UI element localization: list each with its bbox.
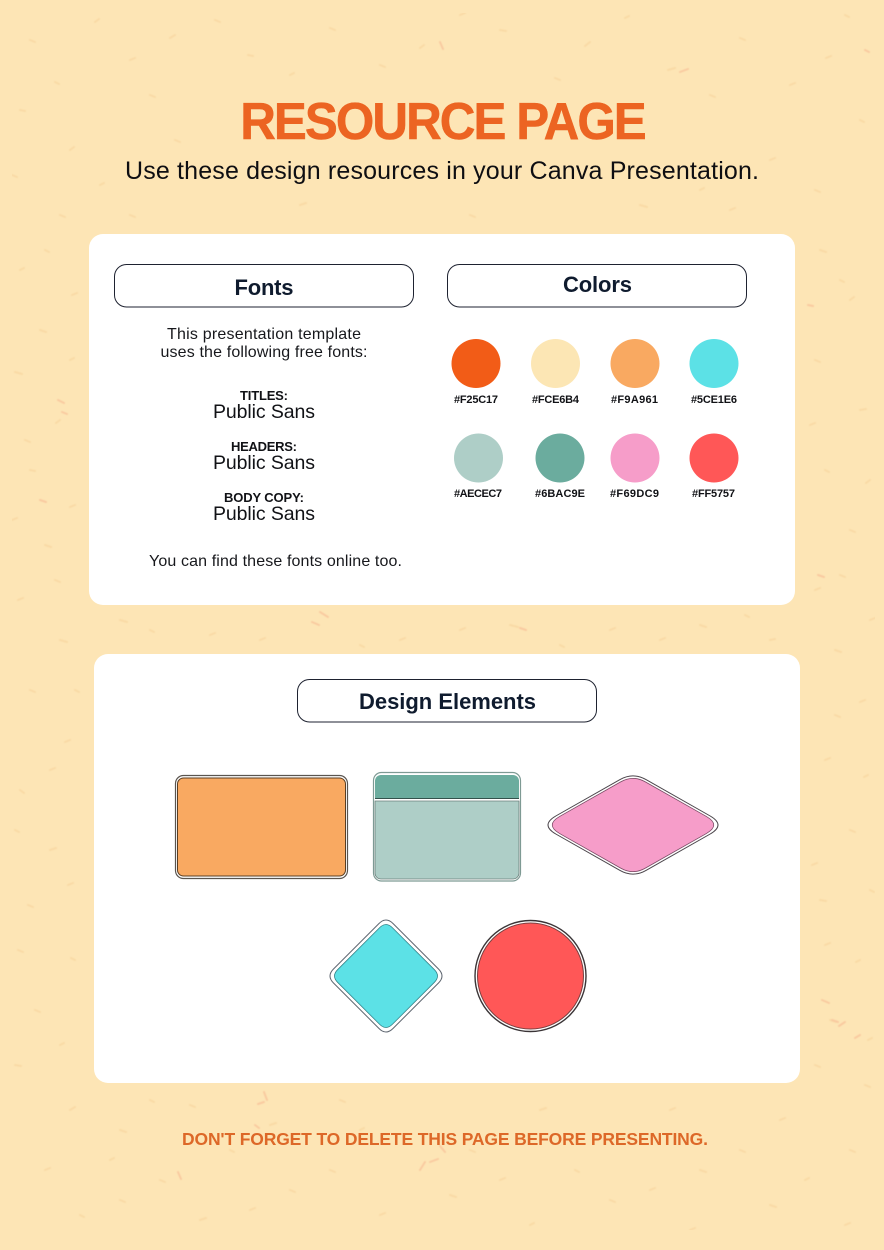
panel: fonts and colors <box>89 234 795 605</box>
swatch: 6BAC9E: #6BAC9E <box>535 488 585 500</box>
text block: titles font: Public Sans <box>213 401 315 423</box>
text block: body copy font <box>213 490 315 525</box>
element: cyan diamond <box>330 920 442 1032</box>
text block: fonts note: You can find these fonts online too. <box>149 553 402 570</box>
swatch: F69DC9: #F69DC9 <box>610 488 659 500</box>
swatch: 5CE1E6 <box>690 339 738 406</box>
swatch: FCE6B4 <box>531 339 580 406</box>
heading: fonts: Fonts <box>234 275 294 300</box>
text block: body copy font: BODY COPY: <box>224 490 304 505</box>
swatch: F9A961 <box>610 339 660 406</box>
text block: body copy font: Public Sans <box>213 503 315 525</box>
text block: titles font: TITLES: <box>240 388 288 403</box>
element: orange rounded rectangle <box>176 776 348 878</box>
heading: fonts <box>114 264 414 307</box>
swatch: F25C17: #F25C17 <box>454 394 498 406</box>
swatch: 6BAC9E <box>535 434 585 500</box>
panel: design elements <box>94 654 800 1083</box>
swatch: F9A961: #F9A961 <box>611 394 658 406</box>
panel: fonts <box>114 264 414 570</box>
element: teal header card <box>374 772 520 881</box>
swatch: AECEC7 <box>454 434 503 500</box>
heading: colors: Colors <box>563 272 632 297</box>
text block: headers font: Public Sans <box>213 452 315 474</box>
panel: colors <box>448 264 746 500</box>
heading: design elements <box>298 680 596 722</box>
element: red circle <box>475 920 586 1032</box>
text block: font intro: uses the following free fonts: <box>160 344 368 361</box>
text block: headers font <box>213 439 315 474</box>
subtitle: Use these design resources in your Canva Presentation. <box>125 157 759 185</box>
swatch: FCE6B4: #FCE6B4 <box>532 394 580 406</box>
title: RESOURCE PAGE <box>240 92 645 150</box>
heading: design elements: Design Elements <box>359 689 536 714</box>
swatch: F69DC9 <box>610 434 660 500</box>
element: pink rhombus <box>548 776 718 874</box>
swatch: F25C17 <box>452 339 500 406</box>
text block: titles font <box>213 388 315 423</box>
swatch: FF5757: #FF5757 <box>692 488 735 500</box>
swatch: AECEC7: #AECEC7 <box>454 488 502 500</box>
heading: colors <box>448 264 746 307</box>
text block: headers font: HEADERS: <box>231 439 297 454</box>
text block: font intro: This presentation template <box>167 326 361 343</box>
text block: font intro <box>160 326 368 361</box>
footer reminder: DON'T FORGET TO DELETE THIS PAGE BEFORE PRESENTING. <box>182 1129 708 1149</box>
swatch: FF5757 <box>690 434 738 500</box>
swatch: 5CE1E6: #5CE1E6 <box>691 394 737 406</box>
